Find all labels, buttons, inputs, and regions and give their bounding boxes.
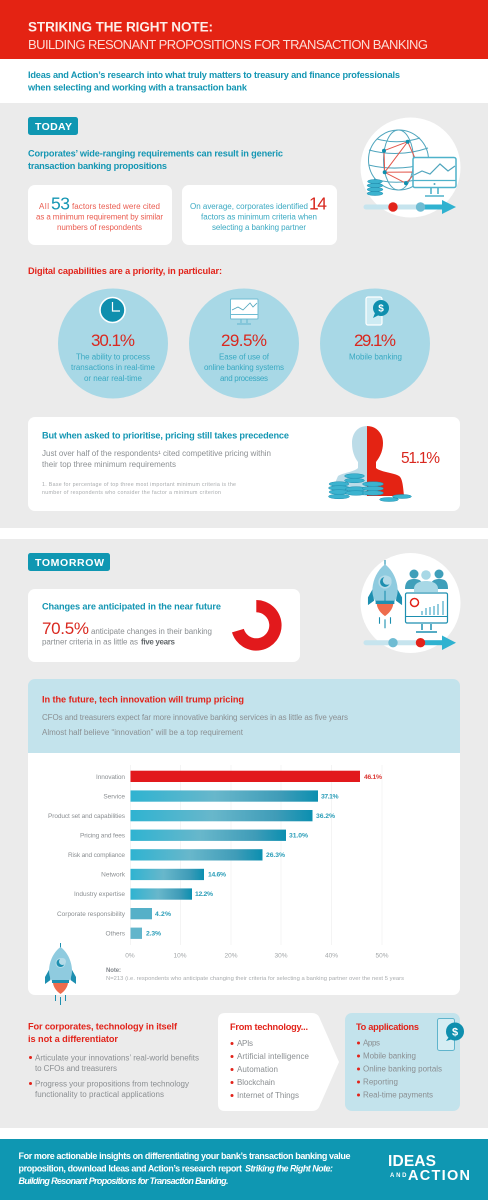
chart axis: 0% (125, 952, 135, 960)
panel: tech innovation: CFOs and treasurers expect far more innovative banking services in as little as five years (42, 713, 348, 722)
panel: tech innovation: Almost half believe “innovation” will be a top requirement (42, 728, 244, 737)
logo: AND (390, 1173, 407, 1179)
tag: today: TODAY (35, 121, 72, 133)
bar: service: 37.1% (321, 794, 338, 800)
card: 14 factors: On average, corporates identified (190, 202, 308, 211)
stat circle: real-time: or near real-time (84, 374, 143, 383)
card: changes anticipated: five years (141, 638, 176, 646)
panel: pricing takes precedence (28, 417, 460, 511)
card: changes anticipated: partner criteria in as little as (42, 638, 138, 646)
bar: others (105, 928, 161, 939)
timeline arrow (364, 636, 456, 650)
stat circle: real-time: 30.1% (91, 331, 135, 350)
bar: risk (68, 849, 285, 860)
panel: pricing takes precedence: their top three minimum requirements (42, 460, 176, 469)
title: STRIKING THE RIGHT NOTE: (28, 20, 213, 34)
panel: to applications: Apps (363, 1038, 380, 1048)
stat circle: ease of use: 29.5% (221, 331, 267, 350)
logo: IDEAS (388, 1153, 436, 1170)
bar: network (101, 869, 226, 880)
bar: industry: 12.2% (195, 891, 213, 898)
panel: pricing takes precedence: number of respondents who consider the factor a minimum criterion (42, 490, 221, 496)
text block: technology not a differentiator: Articulate your innovations’ real-world benefits (35, 1054, 199, 1062)
panel: tech innovation (28, 679, 460, 753)
text block: technology not a differentiator: For corporates, technology in itself (28, 1022, 178, 1032)
heading: generic propositions (28, 148, 283, 171)
chart axis: 40% (325, 952, 338, 960)
chart axis: 50% (375, 952, 389, 960)
icon: mobile with dollar bubble: $ (378, 304, 384, 314)
icon: rocket (45, 943, 76, 1005)
bar: pricing: Pricing and fees (80, 832, 126, 840)
bar: corporate responsibility: 4.2% (155, 911, 171, 918)
arrow panel: from technology: Artificial intelligence (237, 1052, 310, 1061)
text block: technology not a differentiator: to CFOs and treasurers (35, 1064, 117, 1073)
bar: corporate responsibility (57, 908, 171, 919)
panel: pricing takes precedence: 51.1% (401, 450, 440, 467)
chart note: Note: (106, 968, 121, 974)
stat circle: ease of use: online banking systems (204, 363, 284, 372)
call to action text: proposition, download Ideas and Action’s research report (18, 1164, 242, 1174)
donut chart 70.5% (232, 600, 282, 651)
bar: pricing: 31.0% (289, 832, 308, 840)
text block: technology not a differentiator: is not a differentiator (28, 1034, 118, 1044)
bar: others: 2.3% (146, 930, 161, 938)
card: 53 factors: All (39, 202, 49, 211)
intro text: when selecting and working with a transaction bank (27, 82, 248, 92)
icon: monitor (413, 158, 456, 196)
bar: product set (48, 810, 335, 821)
card: changes anticipated (28, 589, 300, 662)
card: 53 factors: factors tested were cited (72, 202, 160, 211)
tag: today (28, 117, 78, 135)
icon: rocket (368, 560, 402, 628)
title (28, 20, 428, 52)
bar: risk: 26.3% (266, 852, 285, 859)
bar: industry (74, 888, 213, 900)
intro text: Ideas and Action’s research into what truly matters to treasury and finance professionals (28, 70, 400, 80)
chart axis: 20% (224, 952, 238, 960)
stat circle: ease of use: and processes (220, 374, 268, 383)
heading: digital capabilities: Digital capabilities are a priority, in particular: (28, 266, 222, 276)
card: changes anticipated: 70.5% (42, 619, 89, 638)
bar: network: 14.6% (208, 872, 226, 878)
header banner (0, 0, 488, 59)
icon: clock (100, 298, 125, 322)
call to action text: For more actionable insights on differentiating your bank’s transaction banking value (18, 1151, 350, 1161)
title: BUILDING RESONANT PROPOSITIONS FOR TRANSACTION BANKING (28, 37, 428, 52)
icon: person and coins (328, 426, 412, 502)
chart note: N=213 (i.e. respondents who anticipate changing their criteria for selecting a banking partner over the next 5 years (106, 976, 404, 982)
bar: corporate responsibility: Corporate responsibility (57, 911, 126, 918)
card: 14 factors (182, 185, 337, 245)
card: 53 factors: 53 (51, 194, 70, 214)
intro text (27, 70, 400, 92)
text block: technology not a differentiator: functionality to practical applications (35, 1090, 164, 1099)
tag: tomorrow: TOMORROW (35, 557, 104, 569)
bar: others: Others (105, 930, 126, 938)
heading: generic propositions: Corporates’ wide-ranging requirements can result in generic (28, 148, 283, 158)
card: changes anticipated: anticipate changes in their banking (91, 627, 212, 636)
stat circle: ease of use (189, 288, 299, 398)
illustration: globe and monitor (360, 118, 460, 218)
text block: technology not a differentiator (28, 1022, 199, 1099)
footer banner (0, 1139, 488, 1200)
call to action text: Building Resonant Propositions for Transaction Banking. (18, 1176, 229, 1186)
illustration: rocket, people and monitor (360, 553, 460, 653)
icon: dashboard monitor (406, 593, 448, 632)
card: changes anticipated: Changes are anticipated in the near future (42, 602, 221, 612)
stat circle: real-time: The ability to process (76, 352, 150, 362)
card: 14 factors: selecting a banking partner (212, 223, 306, 232)
bar: network: Network (101, 872, 126, 878)
icon: coins (367, 180, 383, 196)
panel: to applications: Real-time payments (363, 1090, 433, 1100)
panel: pricing takes precedence: Just over half of the respondents¹ cited competitive pricing within (42, 449, 271, 458)
timeline arrow (364, 200, 456, 214)
panel: to applications (345, 1013, 464, 1111)
icon: people (405, 570, 448, 592)
stat circle: mobile banking (320, 288, 430, 398)
bar: pricing (80, 830, 308, 841)
card: 53 factors (28, 185, 172, 245)
panel: to applications: Mobile banking (363, 1052, 416, 1060)
icon: globe (368, 130, 428, 190)
text block: technology not a differentiator: Progress your propositions from technology (35, 1080, 189, 1088)
bar: risk: Risk and compliance (68, 852, 125, 859)
heading: generic propositions: transaction banking propositions (28, 161, 167, 171)
panel: tech innovation: In the future, tech innovation will trump pricing (42, 694, 244, 704)
tag: tomorrow (28, 553, 110, 571)
panel: to applications: Online banking portals (363, 1064, 442, 1074)
call to action text (18, 1151, 350, 1186)
icon: monitor chart (230, 299, 258, 324)
stat circle: real-time (58, 288, 168, 398)
card: 53 factors: as a minimum requirement by similar (36, 212, 163, 222)
arrow panel: from technology: Internet of Things (237, 1091, 299, 1100)
panel: pricing takes precedence: But when asked to prioritise, pricing still takes precedence (42, 430, 289, 440)
panel: to applications: Reporting (363, 1078, 398, 1086)
arrow panel: from technology: APIs (237, 1039, 253, 1048)
bar: innovation: Innovation (96, 774, 125, 781)
arrow panel: from technology (218, 1013, 339, 1111)
bar: service (103, 790, 338, 802)
panel: bar chart (28, 753, 460, 995)
chart axis: 30% (274, 952, 288, 960)
call to action text: Striking the Right Note: (245, 1164, 333, 1174)
arrow panel: from technology: Blockchain (237, 1078, 275, 1087)
card: 14 factors: 14 (309, 194, 327, 214)
chart axis (125, 952, 389, 960)
stat circle: real-time: transactions in real-time (71, 363, 156, 372)
bar: innovation (96, 771, 382, 782)
arrow panel: from technology: Automation (237, 1065, 278, 1074)
icon: mobile with dollar bubble: $ (452, 1026, 458, 1038)
arrow panel: from technology: From technology... (230, 1022, 308, 1032)
bar: industry: Industry expertise (74, 891, 125, 898)
chart note (106, 968, 404, 982)
logo: ACTION (408, 1168, 470, 1184)
card: 14 factors: factors as minimum criteria when (201, 212, 317, 222)
bar: product set: 36.2% (316, 813, 335, 820)
bar: innovation: 46.1% (364, 774, 382, 781)
bar: service: Service (103, 794, 125, 800)
stat circle: mobile banking: Mobile banking (349, 352, 402, 362)
stat circle: mobile banking: 29.1% (354, 331, 396, 350)
chart axis: 10% (173, 952, 187, 960)
logo (388, 1153, 470, 1184)
stat circle: ease of use: Ease of use of (219, 352, 270, 362)
panel: to applications: To applications (356, 1022, 419, 1032)
panel: pricing takes precedence: 1. Base for percentage of top three most important minimum criteria is the (42, 482, 236, 488)
card: 53 factors: numbers of respondents (57, 223, 142, 232)
bar: product set: Product set and capabilities (48, 813, 126, 820)
